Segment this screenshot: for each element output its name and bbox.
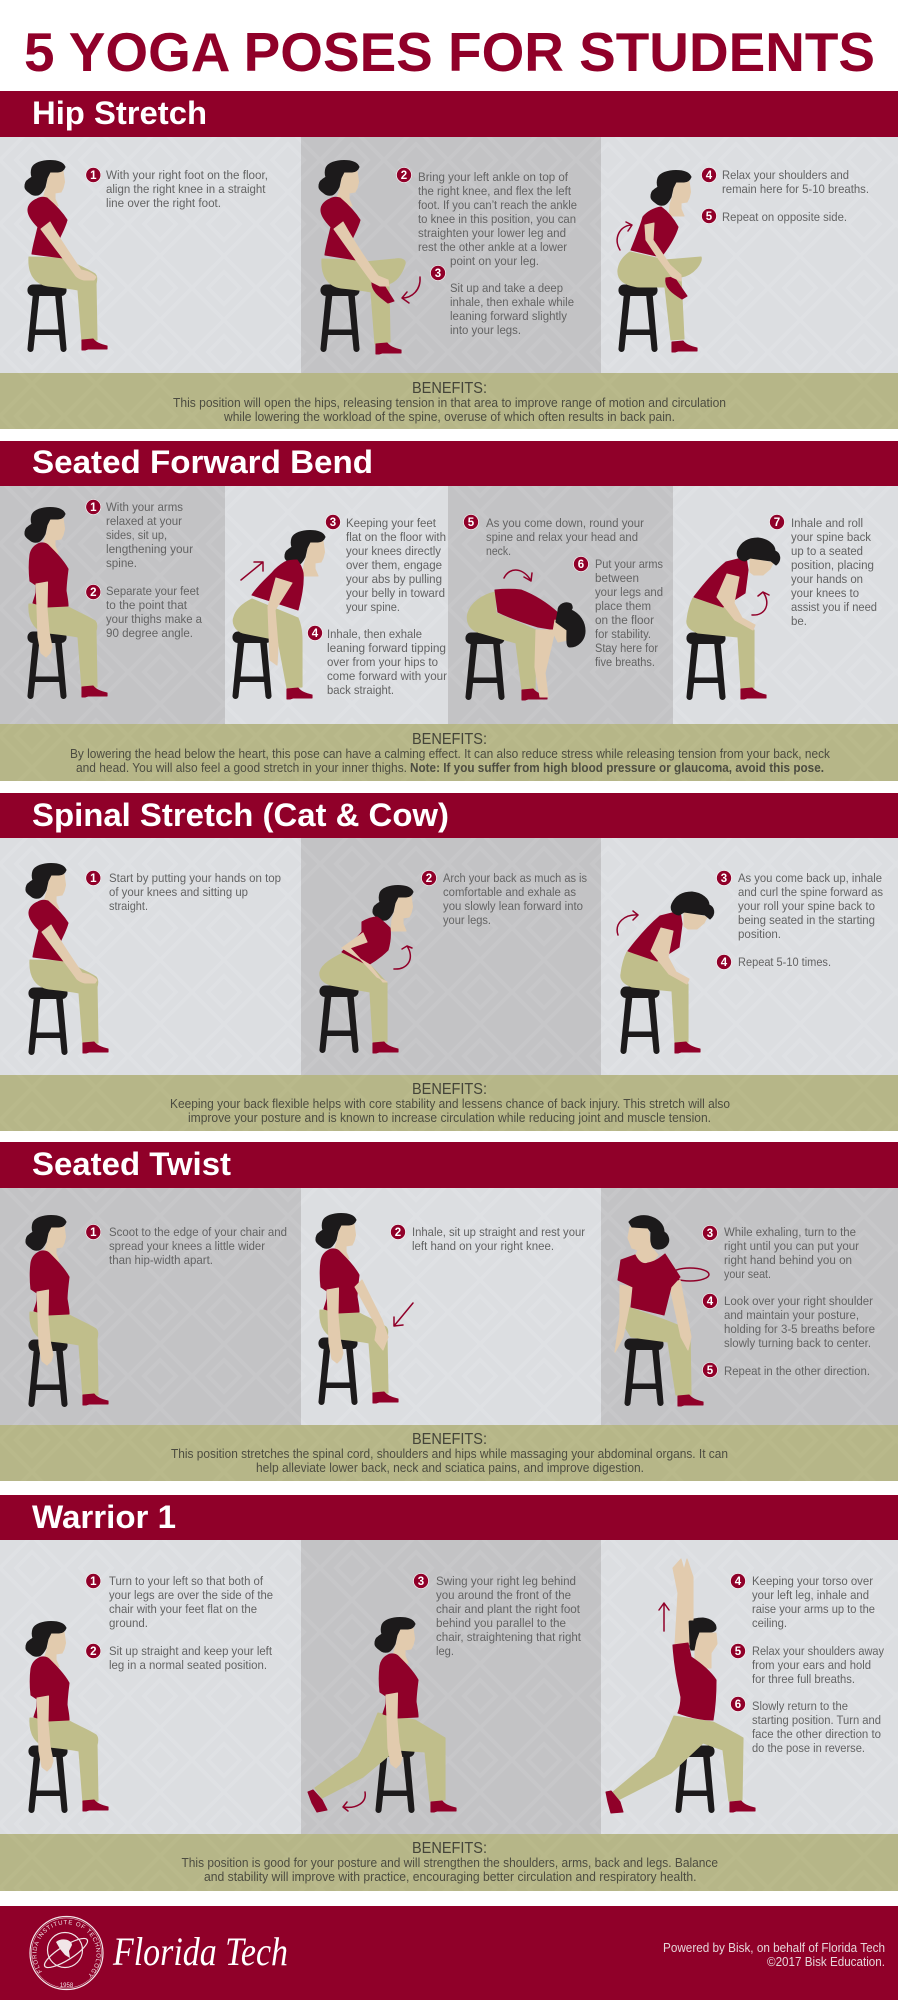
text: steps 1 and 2: 90 degree angle. [106,626,193,640]
text: step 6: place them [595,599,651,613]
text: steps 3 to 5: holding for 3-5 breaths before [724,1322,875,1336]
text: steps 3 to 5: your seat. [724,1267,771,1281]
text: steps 3 and 4: Repeat 5-10 times. [738,955,831,969]
text: steps 3 to 5: right hand behind you on [724,1253,852,1267]
text: steps 1 and 2: 1 [90,1576,97,1588]
panel: steps 2-3 [301,137,601,373]
text: step 2: left hand on your right knee. [412,1239,554,1253]
heading: Seated Twist: Seated Twist [32,1146,231,1182]
text: steps 1 and 2: lengthening your [106,542,193,556]
text: step 5 [464,514,644,558]
benefits: This position is good for your posture and will strengthen the shoulders, arms, back and legs. Balance [182,1856,718,1870]
text: steps 3 and 4: come forward with your [327,669,447,683]
text: step 1: Start by putting your hands on top [109,871,281,885]
arrow: diagonal up [241,562,263,580]
text: steps 1 and 2: ground. [109,1616,148,1630]
text: steps 4 to 6: Slowly return to the [752,1699,848,1713]
panel: step 1 [0,137,301,373]
text: step 3: inhale, then exhale while [450,295,574,309]
text: step 5: spine and relax your head and [486,530,638,544]
text: step 2: point on your leg. [450,254,539,268]
text: step 7: Inhale and roll [791,516,863,530]
text: steps 1 and 2: With your arms [106,500,183,514]
section: Warrior 1 [0,1495,898,1891]
arrow: curved up [752,592,769,615]
text: step 2 [396,168,577,268]
text: steps 3 and 4: being seated in the starting [738,913,875,927]
text: step 1: line over the right foot. [106,196,221,210]
text: steps 3 to 5: right until you can put your [724,1239,859,1253]
text: steps 4 to 6: starting position. Turn and [752,1713,881,1727]
text: step 7: assist you if need [791,600,877,614]
text: step 3: leg. [436,1644,454,1658]
arrow: curved up [394,946,412,969]
text: steps 3 and 4: over from your hips to [327,655,438,669]
section: Seated Twist [0,1142,898,1481]
text: step 7: 7 [774,517,780,529]
panel: steps 1-2 [0,486,225,724]
text: steps 1 and 2: chair with your feet flat on the [109,1602,257,1616]
text: step 3: chair and plant the right foot [436,1602,581,1616]
text: steps 3 to 5: Repeat in the other direction. [724,1364,870,1378]
figure: seated, arms at sides [26,1622,108,1812]
text: steps 4 and 5 [702,168,869,224]
section: Spinal Stretch (Cat & Cow) [0,793,898,1131]
text: steps 3 and 4: 3 [330,517,336,529]
text: step 1: Scoot to the edge of your chair and [109,1225,287,1239]
heading: Warrior 1 [0,1495,898,1540]
text: step 1: 1 [90,873,97,885]
arrow: curved up [617,222,632,250]
text: steps 3 to 5: and maintain your posture, [724,1308,859,1322]
text: steps 4 to 6: do the pose in reverse. [752,1741,865,1755]
panel: step 1 [0,1188,301,1425]
text: step 5: 5 [468,517,475,529]
text: steps 3 and 4: over them, engage [346,558,442,572]
text: step 1: 1 [90,1227,97,1239]
text: step 2 [390,1224,585,1253]
heading: Warrior 1: Warrior 1 [32,1499,176,1535]
text: step 2: you slowly lean forward into [443,899,583,913]
text: step 1 [86,168,268,210]
text: steps 3 and 4: your abs by pulling [346,572,442,586]
heading: Seated Forward Bend [0,441,898,486]
text: step 3: into your legs. [450,323,521,337]
text: step 6: Stay here for [595,641,658,655]
text: steps 3 and 4: 4 [721,957,728,969]
text: step 1: 1 [90,170,97,182]
text: step 3: you around the front of the [436,1588,571,1602]
text: steps 4 to 6: your left leg, inhale and [752,1588,869,1602]
text: step 6: five breaths. [595,655,655,669]
benefits [0,373,898,429]
text: step 2: Arch your back as much as is [443,871,587,885]
figure: ankle over knee [319,160,405,354]
figure: seated, hands on knees [25,160,107,352]
text: step 1: straight. [109,899,148,913]
benefits: BENEFITS: [412,380,487,397]
benefits: Keeping your back flexible helps with core stability and lessens chance of back injury. This stretch will also [170,1097,730,1111]
text: steps 4 to 6: 5 [735,1646,742,1658]
text: step 1: With your right foot on the floor, [106,168,268,182]
text: step 1: spread your knees a little wider [109,1239,265,1253]
panel: steps 3-4 [601,838,898,1075]
figure: back leg extended [308,1618,456,1812]
text: step 3 [414,1574,582,1658]
text: steps 3 and 4: your belly in toward [346,586,445,600]
text: steps 3 and 4: your spine. [346,600,400,614]
text: steps 4 and 5: Repeat on opposite side. [722,210,847,224]
benefits: and stability will improve with practice, encouraging better circulation and respiratory health. [204,1870,696,1884]
heading: Spinal Stretch: Spinal Stretch (Cat & Cow) [32,797,449,833]
text: steps 3 and 4: and curl the spine forward as [738,885,883,899]
text: step 6: between [595,571,639,585]
text: step 3: behind you parallel to the [436,1616,566,1630]
panel: step 2 [301,1188,601,1425]
figure: seated twist [615,1216,703,1406]
text: steps 3 to 5: 3 [707,1228,713,1240]
text: steps 3 to 5: Look over your right shoulder [724,1294,873,1308]
text: step 7: up to a seated [791,544,863,558]
text: steps 3 and 4: your knees directly [346,544,442,558]
text: steps 1 and 2: Separate your feet [106,584,200,598]
text: steps 3 to 5: slowly turning back to center. [724,1336,871,1350]
panel: step 1 [0,838,301,1075]
heading: Seated Forward Bend: Seated Forward Bend [32,444,373,480]
text: step 3: chair, straightening that right [436,1630,582,1644]
text: steps 3 and 4: your roll your spine back to [738,899,875,913]
text: steps 3 to 5: 4 [707,1296,714,1308]
section: Seated Forward Bend [0,441,898,781]
text: step 1: of your knees and sitting up [109,885,248,899]
text: steps 4 to 6: raise your arms up to the [752,1602,875,1616]
text: steps 4 to 6: Relax your shoulders away [752,1644,885,1658]
text: step 3: leaning forward slightly [450,309,568,323]
text: steps 1 and 2: 1 [90,502,97,514]
benefits: BENEFITS: [412,1840,487,1857]
text: step 6: for stability. [595,627,651,641]
benefits: improve your posture and is known to increase circulation while reducing joint and muscle tension. [188,1111,711,1125]
arrow: arc over back [504,570,532,581]
text: step 6: your legs and [595,585,663,599]
text: step 3: 3 [418,1576,424,1588]
text: steps 1 and 2 [86,500,202,640]
text: steps 4 to 6: 4 [735,1576,742,1588]
arrow: diagonal down [394,1303,413,1326]
text: steps 4 and 5: remain here for 5-10 breaths. [722,182,869,196]
arrow: curved back [343,1792,365,1811]
text: step 2: Bring your left ankle on top of [418,170,569,184]
text: steps 1 and 2: to the point that [106,598,188,612]
benefits: while lowering the workload of the spine, overuse of which often results in back pain. [223,410,675,424]
text: steps 3 and 4: back straight. [327,683,394,697]
text: steps 1 and 2 [86,1574,273,1672]
text: step 5: neck. [486,544,511,558]
benefits: and head. You will also feel a good stretch in your inner thighs. [76,761,407,775]
heading: Seated Twist [0,1142,898,1188]
benefits [0,1834,898,1891]
text: steps 3 to 5 [702,1225,875,1378]
text: step 2: rest the other ankle at a lower [418,240,567,254]
logo: Florida Tech seal: 1958 [60,1983,74,1989]
text: step 2: the right knee, and flex the left [418,184,572,198]
text: steps 4 and 5: Relax your shoulders and [722,168,849,182]
text: steps 3 and 4 [308,514,447,697]
text: step 1: align the right knee in a straight [106,182,266,196]
logo wordmark: Florida Tech [112,1929,288,1974]
panel: step 2 [301,838,601,1075]
text: steps 3 and 4: 3 [721,873,727,885]
text: step 7: your hands on [791,572,863,586]
text: step 1 [86,1224,287,1267]
benefits [0,1425,898,1481]
text: step 5: As you come down, round your [486,516,644,530]
credit text: ©2017 Bisk Education. [767,1954,885,1969]
arrow: straight up [659,1603,669,1631]
text: steps 4 to 6: Keeping your torso over [752,1574,873,1588]
figure: leaning forward [618,170,701,352]
figure: seated, arms at sides [25,508,107,698]
heading: Spinal Stretch [0,793,898,838]
text: steps 1 and 2: Turn to your left so that both of [109,1574,263,1588]
text: steps 4 to 6: for three full breaths. [752,1672,855,1686]
arrow: curved [402,277,420,303]
panel: steps 4-6 [601,1540,898,1834]
figure: warrior with raised arms [606,1559,755,1813]
text: step 2: comfortable and exhale as [443,885,576,899]
text: steps 4 to 6: 6 [735,1699,741,1711]
figure: hand on knee [316,1214,398,1404]
benefits: Note: If you suffer from high blood pressure or glaucoma, avoid this pose. [410,761,824,775]
text: steps 4 and 5: 4 [706,170,713,182]
panel: step 3 [301,1540,601,1834]
text: step 7: your knees to [791,586,859,600]
text: step 2: your legs. [443,913,491,927]
title: 5 YOGA POSES FOR STUDENTS [24,21,875,83]
text: steps 1 and 2: sides, sit up, [106,528,167,542]
text: steps 3 and 4: 4 [312,628,319,640]
benefits: This position will open the hips, releasing tension in that area to improve range of motion and circulation [173,396,726,410]
panel: steps 3-4 [225,486,448,724]
benefits: BENEFITS: [412,731,487,748]
text: steps 1 and 2: Sit up straight and keep your left [109,1644,272,1658]
arrow: rotation ring [671,1268,709,1281]
arrow: curved over back [617,911,638,935]
text: step 6: 6 [578,559,584,571]
figure: arched back [320,886,413,1053]
benefits: help alleviate lower back, neck and sciatica pains, and improve digestion. [256,1461,644,1475]
text: step 3 [430,266,574,337]
text: step 1 [86,870,281,913]
text: steps 3 and 4: As you come back up, inhale [738,871,882,885]
text: steps 4 to 6 [730,1574,885,1755]
text: steps 1 and 2: your thighs make a [106,612,202,626]
figure: rolling up [687,538,780,700]
text: steps 3 and 4: Keeping your feet [346,516,437,530]
panel: steps 3-5 [601,1188,898,1425]
text: step 3: Swing your right leg behind [436,1574,576,1588]
text: steps 1 and 2: spine. [106,556,137,570]
text: step 6 [574,556,663,669]
figure: tipping forward [233,530,325,699]
text: steps 1 and 2: relaxed at your [106,514,182,528]
footer [0,1906,898,2000]
text: step 7: be. [791,614,807,628]
benefits [0,1075,898,1131]
text: step 3: Sit up and take a deep [450,281,563,295]
text: step 2: 2 [426,873,432,885]
benefits: By lowering the head below the heart, this pose can have a calming effect. It can also reduce stress while releasing tension from your back, neck [70,747,831,761]
heading: Hip Stretch [0,91,898,137]
text: step 7 [770,514,877,628]
text: step 2 [422,870,587,927]
text: steps 1 and 2: 2 [90,587,97,599]
text: step 2: to knee in this position, you can [418,212,576,226]
text: step 7: position, placing [791,558,874,572]
text: steps 3 to 5: 5 [707,1365,714,1377]
benefits: BENEFITS: [412,1431,487,1448]
figure: folded forward [466,589,585,700]
text: steps 3 and 4: position. [738,927,781,941]
benefits: BENEFITS: [412,1081,487,1098]
panel: steps 1-2 [0,1540,301,1834]
text: steps 4 to 6: from your ears and hold [752,1658,871,1672]
text: steps 4 to 6: ceiling. [752,1616,787,1630]
text: steps 3 and 4: leaning forward tipping [327,641,446,655]
figure: curled spine [621,892,714,1054]
text: steps 1 and 2: your legs are over the side of the [109,1588,273,1602]
text: step 2: 2 [395,1227,401,1239]
text: steps 3 and 4: flat on the floor with [346,530,446,544]
text: step 6: on the floor [595,613,654,627]
figure: seated, arms at sides [26,1216,108,1406]
text: step 2: foot. If you can’t reach the ankle [418,198,577,212]
text: step 2: straighten your lower leg and [418,226,566,240]
panel: steps 5-6 [448,486,673,724]
text: steps 3 and 4: Inhale, then exhale [327,627,422,641]
benefits: This position stretches the spinal cord, shoulders and hips while massaging your abdominal organs. It can [171,1447,728,1461]
panel: step 7 [673,486,898,724]
section: Hip Stretch [0,91,898,429]
text: step 1: than hip-width apart. [109,1253,213,1267]
text: step 2: Inhale, sit up straight and rest your [412,1225,585,1239]
panel: steps 4-5 [601,137,898,373]
text: steps 4 to 6: face the other direction to [752,1727,881,1741]
heading: Hip Stretch: Hip Stretch [32,95,207,131]
text: step 7: your spine back [791,530,872,544]
text: steps 3 to 5: While exhaling, turn to the [724,1225,856,1239]
credit text [663,1940,885,1969]
figure: seated, hands on knees [26,864,108,1054]
logo: Florida Tech seal: FLORIDA INSTITUTE OF TECHNOLOGY [32,1920,101,1978]
text: step 2: 2 [401,170,407,182]
text: steps 1 and 2: 2 [90,1646,97,1658]
text: steps 3 and 4 [716,870,883,970]
text: steps 4 and 5: 5 [706,211,713,223]
text: steps 1 and 2: leg in a normal seated position. [109,1658,267,1672]
text: step 3: 3 [435,268,441,280]
benefits [0,724,898,781]
text: step 6: Put your arms [595,557,663,571]
